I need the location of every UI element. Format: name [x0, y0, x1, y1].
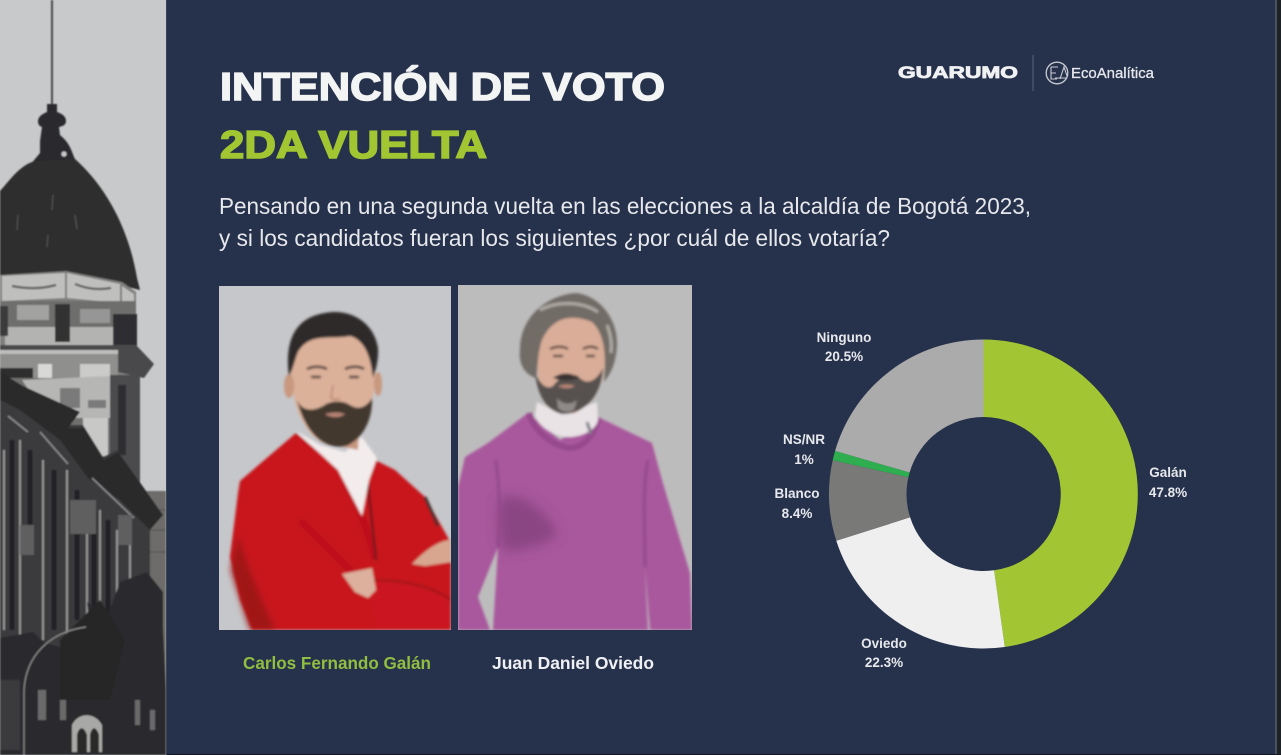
slice: Ninguno 20.5%	[835, 340, 984, 472]
logos	[898, 55, 1155, 91]
forearm and hands	[412, 540, 451, 566]
sweater	[458, 413, 692, 630]
photo: Juan Daniel Oviedo	[458, 285, 692, 630]
shirt collar	[535, 402, 598, 437]
white shirt collar	[296, 431, 377, 516]
logo: Guarumo: GUARUMO	[898, 64, 1018, 82]
dome	[0, 159, 140, 290]
label: Ninguno: 20.5%	[825, 349, 863, 364]
jacket	[230, 433, 451, 630]
tower body	[10, 377, 110, 454]
slice: Oviedo 22.3%	[836, 517, 1005, 648]
face	[537, 312, 605, 413]
question text: Pensando en una segunda vuelta en las elecciones a la alcaldía de Bogotá 2023,	[219, 193, 1031, 219]
street lamp	[24, 627, 86, 755]
neck and face	[343, 437, 360, 451]
question text	[219, 193, 1031, 251]
label: Galán: 47.8%	[1149, 485, 1187, 500]
subtitle: 2DA VUELTA	[220, 124, 487, 167]
trees and foliage	[0, 572, 166, 755]
arched door	[72, 715, 102, 752]
logo: EcoAnalítica: EcoAnalítica	[1071, 65, 1155, 82]
hair	[288, 312, 378, 378]
spire and finial	[51, 0, 53, 104]
label: Blanco: 8.4%	[782, 506, 812, 521]
title: INTENCIÓN DE VOTO	[220, 65, 665, 109]
label: NS/NR: NS/NR	[783, 432, 825, 447]
donut chart	[829, 340, 1138, 648]
photo: Carlos Fernando Galán	[219, 286, 451, 630]
slice: NS/NR 1%	[833, 451, 910, 477]
beard	[297, 398, 372, 447]
eyes and brows	[550, 347, 598, 349]
logo: EcoAnalítica	[1046, 62, 1155, 84]
label: NS/NR: 1%	[794, 452, 814, 467]
beard	[535, 368, 603, 414]
label: Galán: Galán	[1149, 465, 1187, 480]
label: Oviedo: Oviedo	[861, 636, 907, 651]
panel: building photo	[0, 0, 166, 755]
label: Oviedo: 22.3%	[865, 655, 903, 670]
slice: Galán 47.8%	[984, 340, 1138, 647]
candidate name: Galán: Carlos Fernando Galán	[243, 653, 431, 673]
question text: y si los candidatos fueran los siguientes ¿por cuál de ellos votaría?	[219, 225, 890, 251]
title	[220, 65, 665, 167]
slice: Blanco 8.4%	[829, 460, 910, 541]
label: Blanco: Blanco	[774, 486, 820, 501]
drum	[0, 270, 137, 376]
candidate name: Oviedo: Juan Daniel Oviedo	[492, 653, 654, 673]
main facade	[0, 400, 150, 648]
eyes and brows	[307, 367, 364, 369]
neighbouring building	[145, 491, 166, 691]
label: Ninguno: Ninguno	[817, 330, 871, 345]
hair	[520, 293, 617, 382]
